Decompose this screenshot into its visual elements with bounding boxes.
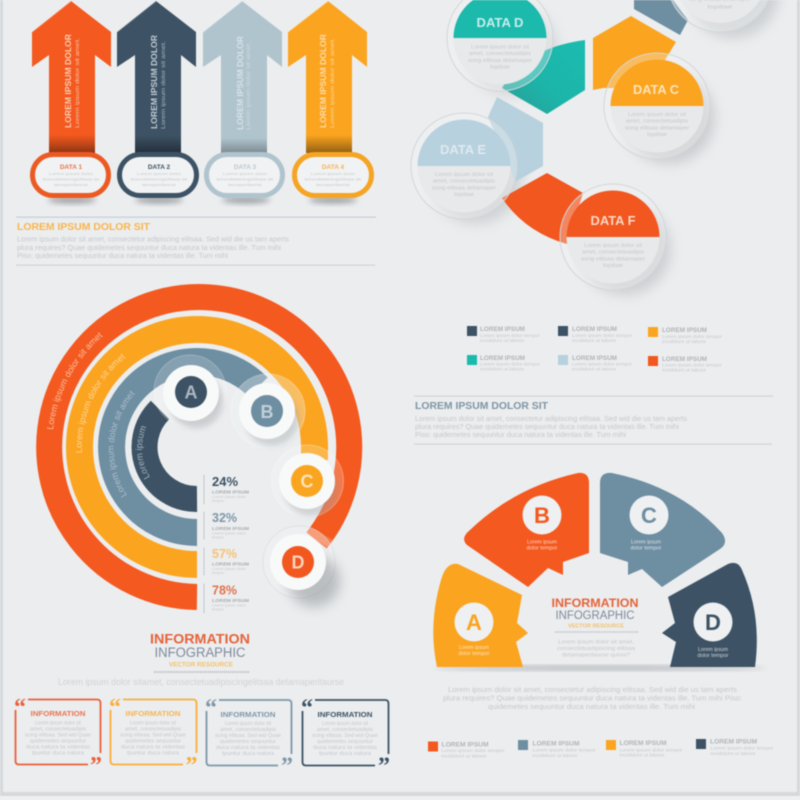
quote box 1: scing elitsaa. Sed wid Quae [25,732,91,738]
text block: gear caption [443,687,742,711]
circle: data F [560,184,666,290]
legend: ring colours: incididunt ut labore [480,366,525,372]
quote box 3: scing elitsaa. Sed wid Quae [215,733,281,739]
circle: data E [411,113,517,219]
legend: gear colours: LOREM IPSUM [442,742,488,748]
legend: gear colours: LOREM IPSUM [710,738,757,746]
legend: gear colours: LOREM IPSUM [620,740,666,747]
quote box 1: quidemetes sequuntur [30,738,86,744]
arrow 4: tamaperitaurse [316,182,351,187]
stat: 24%: Lorem ipsum dolor [212,495,247,499]
quote box 2: “ [109,695,121,721]
arc labels: Lorem ipsum dolor sit amet [108,390,136,498]
marker D: D [292,552,304,572]
quote box 1: INFORMATION [30,711,86,718]
legend: gear colours: incididunt ut labore [532,753,578,758]
quote box 3 [205,696,293,780]
quote box 3: quidemetes sequuntur [220,739,276,745]
quote box 3: Lorem ipsum dolor sit [225,721,272,727]
stat: 57%: 57% [212,547,237,561]
chart: concentric progress arcs [35,283,363,614]
stat: 32%: Lorem ipsum dolor [212,532,247,536]
circle: top right: tspitae [708,4,733,10]
segment C [600,473,725,587]
legend: ring colours: Lorem ipsum dolor tempor [572,362,633,366]
legend: gear colours: Lorem ipsum dolor tempor [442,748,505,753]
arrow 3 [203,1,282,204]
stat: 32%: 32% [212,511,237,525]
arrow 2: Lorem ipsum dolor sit amet. [161,40,167,129]
arrow 1: DATA 1 [60,164,83,171]
ring segment: red [502,173,583,244]
text block: gear caption: plura requires? Quae quidemetes sequuntur duca natura ta videntas ille. Tum mihi Piso: [443,696,742,702]
quote box 4: tpuntur duca natura [319,751,371,757]
marker D [263,526,340,607]
ring segment: light blue [488,97,543,182]
quote box 4: duca natura ta videntas [313,745,378,751]
stat: 57%: Lorem ipsum dolor [212,567,247,571]
arrow 4: Lorem ipsum dolor [311,171,356,176]
quote box 1: Lorem ipsum dolor sit [35,720,82,726]
quote box 4 [301,696,390,780]
segment A: A [466,610,482,635]
arrow 4: Lorem ipsum dolor sit amet. [330,37,336,128]
legend: gear colours [428,738,774,758]
segment C: C [641,503,657,528]
arc labels [46,332,150,498]
legend: gear colours: incididunt ut labore [710,751,756,756]
text block: arrows caption: plura requires? Quae quidemetes sequuntur duca natura ta videntas ille. Tum mihi [17,245,281,252]
legend: ring colours: incididunt ut labore [572,338,617,343]
circle: top right [667,0,773,32]
stat: 78%: tempor [212,608,225,612]
stat: 32%: LOREM IPSUM [212,526,249,531]
arrow 1: tamaperitaurse [54,182,89,187]
quote box 1: ” [90,753,102,779]
segment A: Lorem ipsum [459,645,489,651]
circle: data F: song elitsaa detamaper [581,256,645,262]
quote box 3: ” [281,754,293,780]
stat: 57%: tempor [212,571,225,575]
quote box 3: “ [205,696,217,722]
circle: data E: amet, consectetuadipis [433,178,496,184]
legend: ring colours: incididunt ut labore [662,368,707,372]
quote box 4: INFORMATION [318,712,372,719]
legend: ring colours: Lorem ipsum dolor tempor [662,334,723,339]
stat: 78%: 78% [212,584,237,598]
title: information infographic [58,632,344,687]
legend: ring colours: incididunt ut labore [572,366,617,372]
arc labels: Lorem ipsum [135,426,150,480]
centre label [552,598,638,658]
quote box 2: quidemetes sequuntur [125,738,181,744]
stat: 78%: Lorem ipsum dolor [212,604,247,608]
chart: semicircle gear segments [433,473,765,670]
arrow 4: LOREM IPSUM DOLOR [318,34,328,128]
circle: data D: song elitsaa detamaper [468,58,532,64]
quote box 2 [109,695,198,779]
marker B: B [260,402,274,422]
arrow 3: tetundlatacingelitsaa de [216,176,275,182]
text block: arrows caption: LOREM IPSUM DOLOR SIT [17,221,151,233]
title: information infographic: INFOGRAPHIC [154,645,246,660]
quote box 3: tpuntur duca natura [222,751,274,757]
circle: data D: Lorem ipsum dolor sit [471,44,530,50]
arrow 2: tetundlatacingelitsaa de [130,176,189,182]
legend: ring colours: LOREM IPSUM [662,327,707,334]
quote box 1: “ [14,695,26,721]
circle: data E: song elitsaa detamaper [432,186,496,192]
legend: gear colours: Lorem ipsum dolor tempor [532,748,596,752]
arrow 1: Lorem ipsum dolor [49,171,94,176]
centre label: consectetuadipiscing elitsaa [557,646,635,652]
centre label: detamaperitaurse quires? [562,652,630,658]
legend: gear colours: Lorem ipsum dolor tempor [710,746,774,750]
text block: arrows caption: Lorem ipsum dolor sit amet, consectetur adipiscing elitsaa. Sed wid die us tam aperts [17,236,290,244]
arrow 2 [117,1,196,204]
arrow 1: tetundlatacingelitsaa de [42,176,101,182]
text block: arrows caption: Piso: quidemetes sequuntur duca natura ta videntas ille. Tum mihi [17,253,228,260]
quote box 1: duca natura ta videntas [26,744,91,750]
circle: data F: tspitae [603,263,623,269]
quote box 1 [14,695,102,779]
legend: ring colours: Lorem ipsum dolor tempor [572,333,633,338]
segment B: dolor tempor [526,546,558,552]
arrow 4 [288,1,372,204]
circle: data F: DATA F [590,213,636,228]
stat: 24%: LOREM IPSUM [212,490,249,494]
legend: gear colours: incididunt ut labore [442,754,487,758]
text block: ring caption [414,396,773,445]
arrow 4: tetundlatacingelitsaa de [304,176,363,182]
legend: ring colours: Lorem ipsum dolor tempor [662,362,723,368]
arrow 3: tamaperitaurse [228,182,263,187]
segment B: B [534,503,550,528]
circle: data C: DATA C [633,82,680,97]
stat: 32%: tempor [212,536,225,540]
legend: ring colours: LOREM IPSUM [572,326,617,333]
legend: ring colours: Lorem ipsum dolor tempor [480,362,541,366]
stat: 57%: LOREM IPSUM [212,562,249,566]
arc labels: Lorem ipsum dolor sit amet [75,354,126,453]
quote box 3: amet, consectetuadipis [220,727,277,733]
legend: ring colours: LOREM IPSUM [480,355,525,362]
arc: blue 32% [112,362,258,532]
text block: arrows caption [16,216,376,266]
quote box 4: “ [301,696,313,722]
segment D: D [705,610,721,635]
legend: ring colours: LOREM IPSUM [480,326,525,333]
legend: ring colours: LOREM IPSUM [662,356,707,363]
title: information infographic: VECTOR RESOURCE [169,662,234,668]
segment B: Lorem ipsum [527,540,557,546]
text block: ring caption: plura requires? Quae quidemetes sequuntur duca natura ta videntas ille. Tum mihi [415,424,679,431]
legend: ring colours: incididunt ut labore [480,338,525,343]
stat: 32% [204,511,249,540]
arrow 2: Lorem ipsum dolor [137,171,182,176]
ring segment: teal [502,40,585,114]
arrow 1 [32,1,111,204]
segment A [433,564,528,667]
quote box 2: scing elitsaa. Sed wid Quae [120,732,186,738]
arrow 1: Lorem ipsum dolor sit amet. [75,37,81,128]
circle: data D: tspitae [490,64,510,70]
stat: 24%: tempor [212,499,225,503]
title: information infographic: INFORMATION [150,632,250,646]
ring segment: orange [593,16,676,90]
legend: ring colours: Lorem ipsum dolor tempor [480,333,541,338]
quote box 3: INFORMATION [220,712,276,719]
circle: data F: Lorem ipsum dolor sit [584,243,643,249]
arrow 3: DATA 3 [234,164,257,171]
circle: data C: song elitsaa detamaper [625,126,689,132]
marker C: C [300,472,314,492]
segment C: Lorem ipsum [631,540,661,546]
legend: gear colours: incididunt ut labore [620,752,665,758]
quote box 2: amet, consectetuadipis [125,726,182,732]
stat: 24% [204,475,249,504]
quote box 2: tpuntur duca natura [127,750,179,756]
circle: data E: tspitae [454,192,474,198]
circle: data D: DATA D [476,15,524,30]
segment D: Lorem ipsum [698,647,728,653]
text block: ring caption: Piso: quidemetes sequuntur duca natura ta videntas ille. Tum mihi [415,432,626,439]
quote box 4: Lorem ipsum dolor sit [322,721,369,727]
legend: gear colours: LOREM IPSUM [532,740,580,748]
circle: data D: amet, consectetuadipis [469,51,532,57]
circle: data C: Lorem ipsum dolor sit [628,112,687,118]
circle: data E: Lorem ipsum dolor sit [435,172,494,178]
stat: 78%: LOREM IPSUM [212,598,249,603]
quote box 2: duca natura ta videntas [121,744,186,750]
centre label: VECTOR RESOURCE [568,624,624,630]
text block: ring caption: LOREM IPSUM DOLOR SIT [415,400,549,412]
stat: 24%: 24% [212,475,238,489]
arc: orange 57% [79,329,314,564]
circle: data C [604,53,710,159]
marker A [154,355,226,428]
quote box 3: duca natura ta videntas [216,745,281,751]
arc: navy 24% [145,410,197,499]
centre label: INFOGRAPHIC [556,610,634,622]
quote box 2: INFORMATION [126,711,180,718]
marker A: A [184,382,198,402]
quote box 4: quidemetes sequuntur [317,739,373,745]
arrow 3: Lorem ipsum dolor sit amet. [246,41,252,130]
arrow 3: Lorem ipsum dolor [223,171,268,176]
text block: ring caption: Lorem ipsum dolor sit amet, consectetur adipiscing elitsaa. Sed wid die us tam aperts [415,416,688,423]
arrow 2: DATA 2 [148,164,171,171]
arrow 2: LOREM IPSUM DOLOR [149,35,159,129]
quote box 4: amet, consectetuadipis [317,727,374,733]
arrow 1: LOREM IPSUM DOLOR [63,34,73,128]
segment D: dolor tempor [698,653,729,659]
stat: 78% [204,584,249,613]
segment A: dolor tempor [458,651,490,657]
legend: ring colours: incididunt ut labore [662,339,707,344]
arc: red 78% [49,297,349,597]
quote box 1: tpuntur duca natura [32,750,84,756]
marker B [231,374,305,448]
circle: data E: DATA E [440,142,486,157]
legend: ring colours [467,326,723,372]
panel: hexagon ring [411,0,779,295]
centre label: INFORMATION [552,598,638,610]
circle: data D [447,0,553,91]
circle shadows [430,0,779,295]
text block: gear caption: Lorem ipsum dolor sit amet, consectetur adipiscing elitsaa. Sed wid die us tam aperts [448,687,738,694]
arrow 4: DATA 4 [322,164,345,171]
centre label: Lorem ipsum dolor sit amet, [558,640,634,646]
segment D [662,563,757,667]
marker C [272,445,344,517]
legend: gear colours: Lorem ipsum dolor tempor [620,748,683,752]
quote box 2: ” [186,753,198,779]
panel: arrows [32,1,372,204]
stat: 57% [204,547,249,575]
arrow 2: tamaperitaurse [142,182,177,187]
ring segment: blue-grey [634,0,688,35]
circle: data C: tspitae [647,132,667,138]
title: information infographic: Lorem ipsum dolor sitamet, consectetuadipiscingelitsaa detamaperitaurse [58,677,344,687]
text block: gear caption: quidemetes sequuntur duca natura ta videntas ille. Tum mihi [488,704,695,711]
circle: data C: amet, consectetuadipis [626,118,689,124]
arrow 3: LOREM IPSUM DOLOR [235,36,245,130]
arc labels: Lorem ipsum dolor sit amet [46,332,104,430]
quote box 1: amet, consectetuadipis [30,726,87,732]
quote box 4: ” [378,754,390,780]
legend: ring colours: LOREM IPSUM [572,355,617,362]
quote box 2: Lorem ipsum dolor sit [130,720,177,726]
segment B [464,473,589,587]
segment C: dolor tempor [630,546,662,552]
circle: data F: amet, consectetuadipis [582,250,645,256]
quote box 4: scing elitsaa. Sed wid Quae [312,733,378,739]
